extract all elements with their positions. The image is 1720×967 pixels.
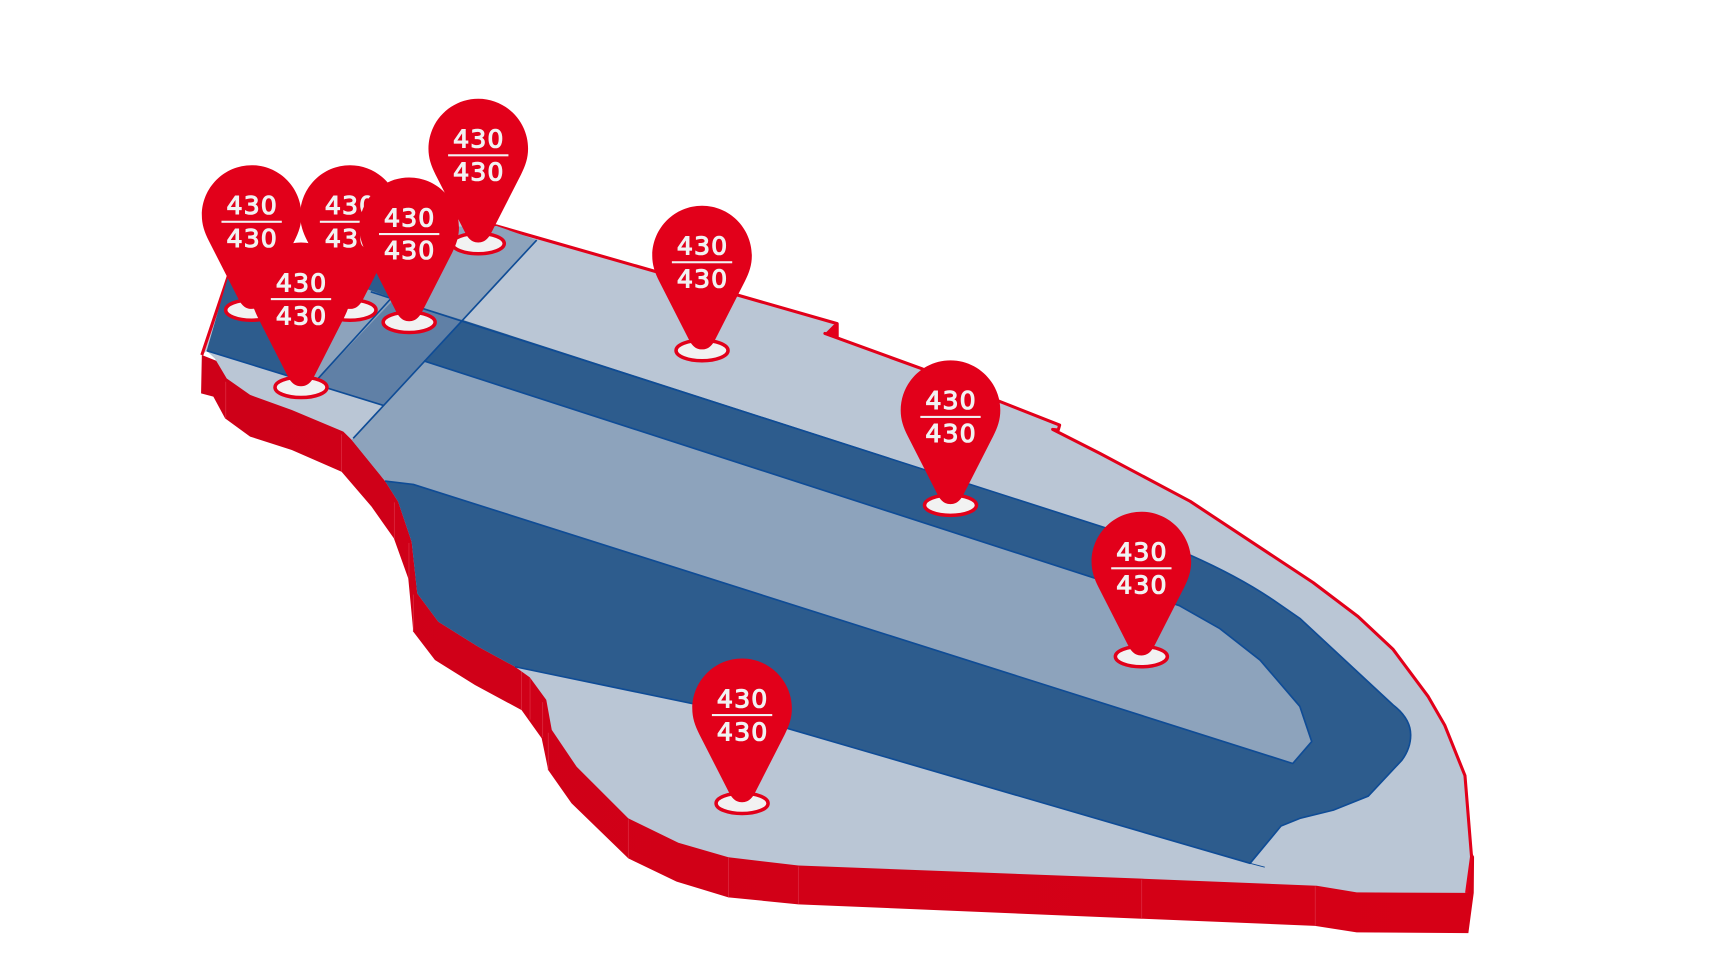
pin value: 430	[453, 125, 505, 154]
pin base ring	[226, 300, 278, 320]
overlap zone: cross band over channel	[313, 299, 463, 405]
pin value: 430	[276, 301, 327, 330]
platform side wall	[201, 355, 1474, 933]
fraction bar	[672, 261, 732, 263]
pin body	[359, 178, 459, 321]
zone boundary lines	[207, 227, 1411, 867]
pin base ring	[452, 233, 504, 254]
pin base ring	[1115, 646, 1167, 667]
pin value: 430	[384, 236, 435, 265]
pin value: 430	[276, 268, 327, 297]
fraction bar	[320, 221, 380, 223]
pin: upper light area	[652, 206, 752, 361]
fraction bar	[712, 714, 772, 716]
mid zone: left patch	[298, 287, 394, 384]
pin body	[428, 99, 528, 242]
pin value: 430	[1116, 570, 1168, 599]
pin body	[652, 206, 752, 349]
pin base ring	[275, 377, 327, 398]
pin value: 430	[226, 224, 278, 253]
pin value: 430	[325, 224, 376, 253]
dark zone: left end	[207, 255, 394, 405]
pin value: 430	[925, 386, 977, 415]
mid zone: long central strip	[352, 361, 1312, 763]
pin: lower light area	[692, 659, 792, 814]
pin value: 430	[925, 419, 977, 448]
pin body	[251, 243, 351, 386]
platform outer edge line	[202, 217, 1472, 893]
pin value: 430	[677, 264, 728, 293]
pin value: 430	[325, 191, 376, 220]
fraction bar	[221, 221, 282, 223]
pin: second from left	[300, 165, 400, 320]
dark zone: main channel	[385, 320, 1411, 863]
pin base ring	[716, 793, 768, 814]
pin value: 430	[677, 232, 728, 261]
pin value: 430	[226, 191, 278, 220]
pin value: 430	[453, 157, 505, 186]
pin base ring	[383, 312, 435, 333]
platform top surface	[202, 217, 1472, 893]
pin: cross band middle	[359, 178, 459, 333]
pin base ring	[324, 300, 376, 320]
pin: far left	[202, 165, 301, 320]
fraction bar	[920, 416, 981, 418]
pin base ring	[676, 340, 728, 361]
pin: upper channel	[901, 360, 1000, 515]
pin value: 430	[717, 717, 768, 746]
fraction bar	[1111, 567, 1172, 569]
pin body	[300, 165, 400, 309]
pin base ring	[924, 495, 976, 515]
mid zone: upper cross band	[394, 226, 537, 320]
pin value: 430	[1116, 538, 1168, 567]
pin body	[901, 360, 1000, 504]
pin: front left	[251, 243, 351, 398]
pin body	[692, 659, 792, 802]
fraction bar	[379, 233, 439, 235]
pin: central strip east	[1092, 512, 1191, 667]
pin body	[1092, 512, 1191, 655]
fraction bar	[271, 298, 331, 300]
pin value: 430	[717, 684, 768, 713]
pin value: 430	[384, 203, 435, 232]
fraction bar	[448, 154, 508, 156]
pin body	[202, 165, 301, 309]
pin: top cross band	[428, 99, 528, 254]
